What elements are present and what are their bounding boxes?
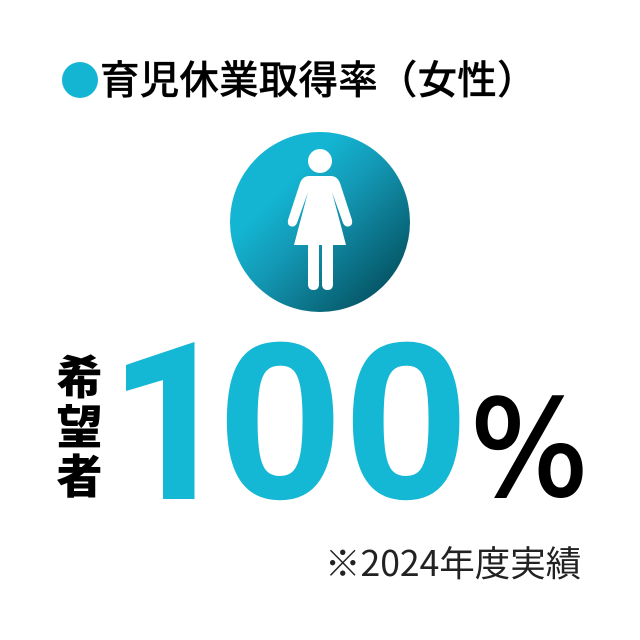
label: 希望者: 望 xyxy=(56,392,102,458)
big number 100: 0 xyxy=(344,296,469,546)
percent sign: % xyxy=(470,373,588,527)
footnote: ※2024年度実績 xyxy=(325,536,581,587)
icon: female figure in gradient circle xyxy=(230,132,410,312)
label: 希望者: 希 xyxy=(56,342,102,408)
big number 100 xyxy=(126,342,460,500)
label: 希望者 xyxy=(56,342,102,507)
heading: 育児休業取得率（女性） xyxy=(100,49,537,106)
big number 100: 0 xyxy=(218,296,343,546)
heading bullet xyxy=(62,62,98,98)
label: 希望者: 者 xyxy=(56,441,102,507)
big number 100: 1 xyxy=(107,296,232,546)
